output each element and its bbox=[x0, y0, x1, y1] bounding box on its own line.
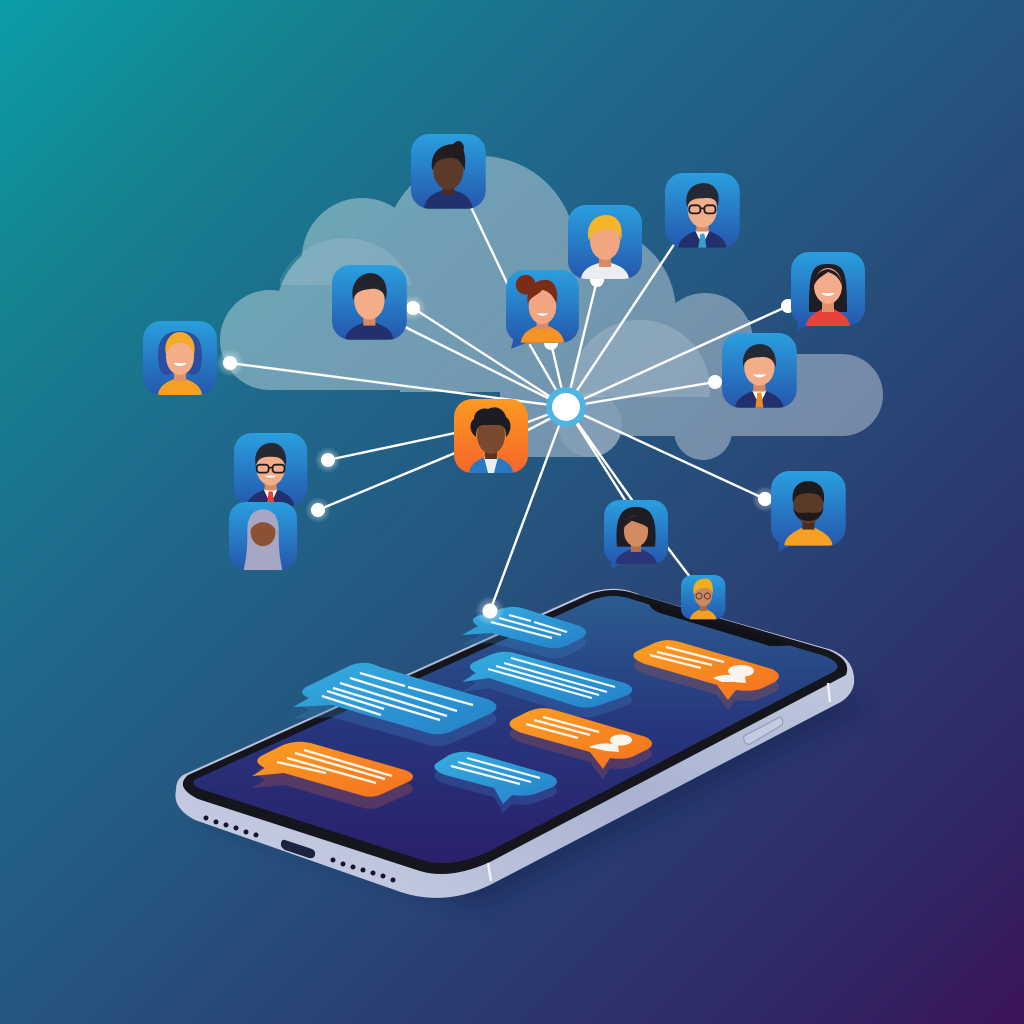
central hub bbox=[546, 387, 586, 427]
phone screen bbox=[193, 596, 837, 863]
charging port bbox=[281, 840, 315, 858]
clouds bbox=[220, 156, 883, 460]
phone shadow bbox=[200, 625, 870, 908]
chat bubble: medium blue bbox=[462, 652, 632, 718]
chat bubble: large blue bbox=[293, 663, 496, 746]
avatar: redhead woman bbox=[506, 270, 579, 349]
speaker holes left bbox=[204, 816, 258, 838]
phone body bbox=[175, 589, 854, 898]
antenna bands bbox=[488, 683, 830, 881]
side button bbox=[744, 717, 783, 744]
connection lines bbox=[230, 205, 788, 611]
phone bezel bbox=[183, 590, 847, 874]
chat bubble: orange middle bbox=[510, 708, 652, 779]
avatar: woman in hijab bbox=[229, 502, 297, 570]
icon: person bbox=[713, 665, 754, 683]
glowing node above phone bbox=[475, 596, 505, 626]
avatar: woman with dark bob bbox=[604, 500, 668, 569]
avatar: man with glasses bbox=[665, 173, 740, 248]
notch bbox=[649, 603, 795, 646]
icon: person bbox=[589, 734, 632, 752]
smartphone bbox=[175, 589, 854, 898]
connection nodes bbox=[216, 273, 795, 523]
avatar: man with dark skin and bun bbox=[411, 134, 486, 209]
chat bubble: orange upper right bbox=[633, 640, 779, 710]
avatar: man in suit with orange tie bbox=[722, 333, 797, 408]
avatar: woman with long black hair bbox=[791, 252, 865, 331]
avatar: man with glasses and red tie bbox=[234, 433, 307, 506]
avatar: small woman with blonde hair bbox=[681, 575, 725, 619]
chat bubble: blue small lower bbox=[434, 752, 557, 813]
avatar: bearded man bbox=[771, 471, 846, 552]
avatar: far left blonde woman bbox=[143, 321, 217, 395]
speaker holes right bbox=[330, 858, 396, 882]
avatar: blond man bbox=[568, 205, 642, 279]
chat bubble: orange lower left bbox=[252, 742, 413, 809]
avatar: man in navy shirt bbox=[332, 265, 407, 340]
chat bubble: small blue top bbox=[462, 607, 586, 658]
avatar: central orange curly hair bbox=[454, 399, 528, 473]
